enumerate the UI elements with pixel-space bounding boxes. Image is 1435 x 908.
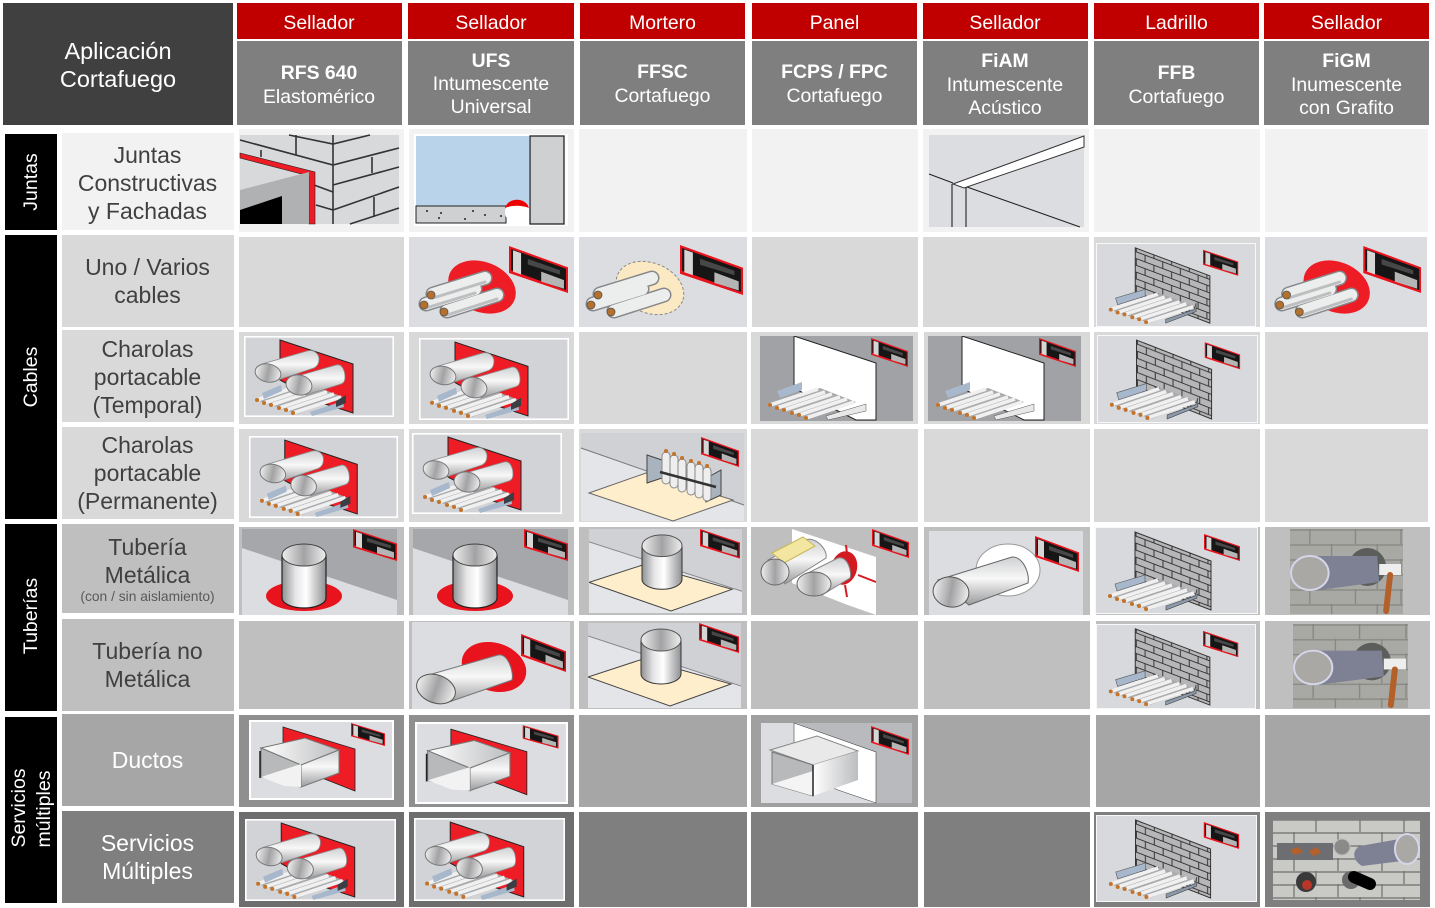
heading: Aplicación Cortafuego: Aplicación bbox=[64, 38, 172, 64]
column header: FFSC bbox=[580, 3, 745, 125]
icon: UFS plastic pipe with red seal bbox=[412, 622, 570, 709]
row: Charolas portacable (Temporal): Charolas bbox=[101, 336, 194, 362]
row: Charolas portacable (Temporal) bbox=[62, 330, 1428, 424]
icon: FFSC pipe on plate bbox=[588, 623, 741, 708]
photo: FiGM mixed penetrations bbox=[1265, 812, 1430, 907]
row: Tubería no Metálica: Tubería no bbox=[92, 638, 203, 664]
icon: FFB brick tray bbox=[1097, 336, 1258, 422]
column header: FiGM: con Grafito bbox=[1299, 97, 1394, 119]
row: Servicios Múltiples: Múltiples bbox=[102, 858, 193, 884]
icon: UFS mixed services bbox=[409, 812, 574, 907]
icon: joint with sealant bead bbox=[414, 134, 568, 226]
icon: FFSC mortar floor with vertical cables bbox=[581, 433, 744, 521]
icon: FFSC cables with mortar bbox=[579, 237, 747, 327]
row: Charolas portacable (Permanente) bbox=[62, 427, 1428, 522]
column header: UFS bbox=[408, 3, 574, 125]
column header: FiAM: FiAM bbox=[981, 50, 1029, 72]
column header: FFB: Ladrillo bbox=[1145, 12, 1208, 34]
column header: RFS 640: Elastomérico bbox=[263, 86, 375, 108]
heading: Aplicación Cortafuego: Cortafuego bbox=[60, 66, 176, 92]
row: Tubería Metálica: (con / sin aislamiento) bbox=[80, 589, 215, 604]
icon: FCPS duct in panel bbox=[751, 715, 918, 807]
column header: FFB: FFB bbox=[1158, 62, 1195, 84]
icon: brick corner joint bbox=[240, 135, 399, 224]
row: Charolas portacable (Permanente): portacable bbox=[94, 460, 201, 486]
row: Tubería no Metálica: Metálica bbox=[105, 666, 191, 692]
icon: UFS metal pipe through floor bbox=[413, 529, 568, 615]
column header: UFS: UFS bbox=[472, 50, 510, 72]
row: Tubería Metálica bbox=[62, 524, 1430, 615]
row: Charolas portacable (Temporal): portacable bbox=[94, 364, 201, 390]
row: Tubería no Metálica bbox=[62, 619, 1430, 711]
row: Servicios Múltiples bbox=[62, 811, 1430, 907]
column header: FCPS / FPC: Cortafuego bbox=[787, 85, 882, 107]
category: Tuberías bbox=[5, 524, 57, 711]
column header: FFSC: FFSC bbox=[637, 61, 688, 83]
photo: FiGM pipe with brush bbox=[1293, 624, 1408, 708]
column header: UFS: Intumescente bbox=[433, 73, 549, 95]
column header: FFB: Cortafuego bbox=[1129, 86, 1224, 108]
column header: FiGM: Inumescente bbox=[1291, 74, 1402, 96]
column header: RFS 640 bbox=[237, 3, 402, 125]
icon: FCPS panel tray bbox=[760, 336, 913, 421]
column header: FCPS / FPC bbox=[752, 3, 917, 125]
column header: RFS 640: Sellador bbox=[283, 12, 355, 34]
icon: UFS duct bbox=[409, 715, 574, 807]
column header: FCPS / FPC: FCPS / FPC bbox=[781, 61, 888, 83]
category: Juntas: Juntas bbox=[20, 153, 42, 211]
row: Servicios Múltiples: Servicios bbox=[101, 830, 194, 856]
icon: RFS 640 cable tray bbox=[245, 337, 393, 416]
panel: header title block bbox=[3, 3, 233, 125]
category: Servicios múltiples: Servicios bbox=[8, 768, 30, 848]
heading: Aplicación Cortafuego bbox=[60, 38, 176, 92]
row: Uno / Varios cables bbox=[62, 235, 1427, 327]
row: Tubería Metálica: Tubería bbox=[108, 534, 187, 560]
row: Juntas Constructivas y Fachadas: Constructivas bbox=[78, 170, 217, 196]
column header: UFS: Sellador bbox=[455, 12, 527, 34]
column header: FiAM: Intumescente bbox=[947, 74, 1063, 96]
icon: FCPS pipes with collar bbox=[761, 529, 909, 615]
icon: FFB brick wall bbox=[1094, 812, 1260, 907]
column header: FiGM: Sellador bbox=[1311, 12, 1383, 34]
column header: UFS: Universal bbox=[451, 96, 531, 118]
row: Uno / Varios cables: Uno / Varios bbox=[85, 254, 210, 280]
column header: FiGM bbox=[1264, 3, 1429, 125]
row: Ductos bbox=[62, 714, 1430, 807]
column header: FiGM: FiGM bbox=[1322, 50, 1371, 72]
column header: FFSC: Mortero bbox=[629, 12, 696, 34]
icon: FFB brick wall bbox=[1096, 624, 1256, 709]
row: Juntas Constructivas y Fachadas: y Fachadas bbox=[88, 198, 207, 224]
column header: FFSC: Cortafuego bbox=[615, 85, 710, 107]
icon: FFB bricks with cable tray bbox=[1094, 237, 1260, 327]
category: Cables: Cables bbox=[20, 346, 42, 407]
photo: FiGM pipe with brush bbox=[1290, 529, 1403, 614]
icon: FFB brick wall bbox=[1096, 528, 1258, 614]
category: Juntas bbox=[5, 134, 57, 230]
category: Cables bbox=[5, 235, 57, 519]
row: Ductos: Ductos bbox=[112, 747, 183, 773]
icon: FiAM panel tray bbox=[928, 336, 1081, 421]
column header: RFS 640: RFS 640 bbox=[281, 62, 357, 84]
row: Uno / Varios cables: cables bbox=[114, 282, 181, 308]
icon: UFS cables with red seal bbox=[409, 237, 574, 327]
column header: FFB bbox=[1094, 3, 1259, 125]
icon: UFS cable tray bbox=[413, 434, 561, 513]
icon: RFS 640 metal pipe through floor bbox=[242, 529, 397, 615]
row: Charolas portacable (Permanente): (Permanente) bbox=[77, 488, 218, 514]
row: Juntas Constructivas y Fachadas: Juntas bbox=[114, 142, 181, 168]
icon: FiGM cables with red seal bbox=[1265, 237, 1427, 327]
icon: UFS cable tray bbox=[420, 339, 568, 419]
row: Tubería Metálica: Metálica bbox=[105, 562, 191, 588]
icon: acoustic sealant corner bbox=[923, 129, 1089, 232]
row: Juntas Constructivas y Fachadas bbox=[62, 129, 1428, 232]
icon: FiAM pipe with flange bbox=[929, 531, 1083, 615]
column header: FiAM bbox=[923, 3, 1088, 125]
category: Servicios múltiples bbox=[5, 717, 57, 903]
column header: FCPS / FPC: Panel bbox=[810, 12, 859, 34]
icon: FFSC metal pipe on plate bbox=[589, 529, 742, 613]
icon: RFS 640 cable tray bbox=[250, 437, 397, 517]
row: Charolas portacable (Permanente): Charolas bbox=[101, 432, 194, 458]
column header: FiAM: Sellador bbox=[969, 12, 1041, 34]
icon: RFS 640 mixed services bbox=[239, 812, 404, 907]
icon: RFS 640 duct bbox=[239, 715, 404, 807]
category: Servicios múltiples: múltiples bbox=[33, 770, 55, 847]
category: Tuberías: Tuberías bbox=[20, 578, 42, 654]
column header: FiAM: Acústico bbox=[968, 97, 1042, 119]
row: Charolas portacable (Temporal): (Temporal) bbox=[93, 392, 202, 418]
